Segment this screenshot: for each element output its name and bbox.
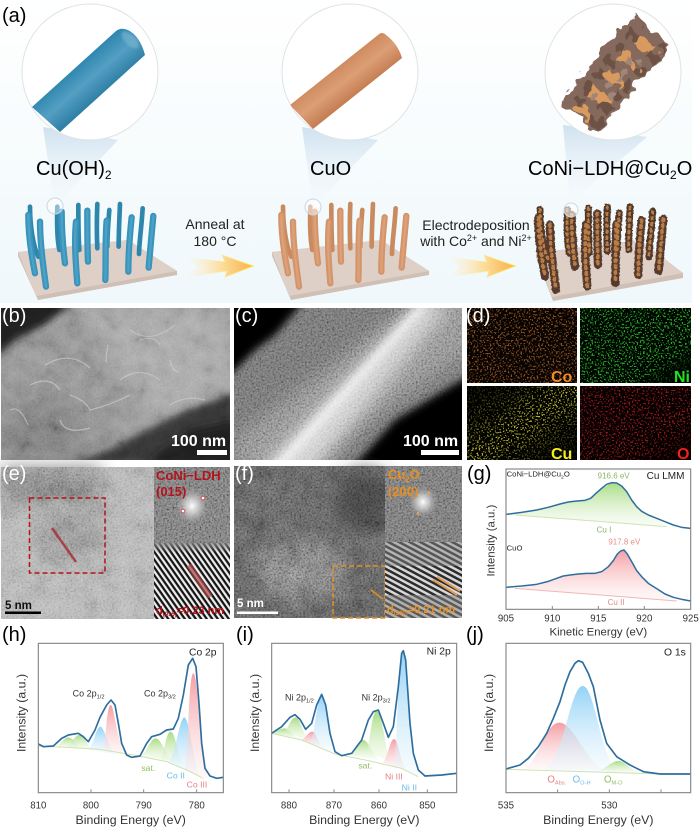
panel label j: (j): [466, 624, 484, 646]
scale bar f: [237, 598, 278, 614]
text: anneal condition: [185, 216, 245, 249]
frame: [38, 643, 223, 793]
peak labels: Cu I: [597, 526, 611, 535]
x axis title: Binding Energy (eV): [309, 813, 419, 827]
x axis: 910: [544, 614, 560, 625]
peak labels: 3/2: [168, 695, 176, 701]
x axis: 850: [419, 800, 435, 811]
label CoNi-LDH (015): (015): [156, 484, 186, 499]
d spacing e: =0.23 nm: [177, 605, 224, 617]
d spacing e: (015): [163, 612, 177, 618]
x axis: 880: [281, 800, 297, 811]
curve: CuO: [506, 550, 691, 601]
lattice marker: [52, 528, 76, 562]
peak labels: [285, 693, 391, 705]
panel a: synthesis schematic: [0, 0, 692, 303]
y axis title: Intensity (a.u.): [482, 674, 496, 752]
fit OAbs: [523, 723, 603, 770]
panel e: HRTEM CoNi-LDH: [1, 467, 230, 619]
sample labels: CoNi−LDH@Cu: [507, 470, 561, 479]
peak labels: Co 2p: [73, 689, 97, 699]
label Cu2O (200): 2: [405, 475, 410, 484]
text: electrodeposition condition: and Ni: [477, 233, 522, 249]
frame: [506, 643, 691, 793]
chart h: Co 2p: [14, 643, 223, 827]
FFT inset: [385, 466, 462, 542]
panel label f: (f): [235, 463, 254, 485]
text: electrodeposition condition: 2+: [522, 233, 532, 243]
panel b: SEM image: [1, 308, 230, 460]
fits satellite: [272, 711, 390, 762]
label Cu(OH)2: Cu(OH): [36, 158, 105, 180]
scale bar c: 100 nm: [403, 433, 458, 450]
map Ni: Ni: [674, 369, 690, 386]
nanosheet wrinkles: [10, 325, 205, 430]
callout cone: CoNi-LDH: [563, 125, 647, 203]
lattice marker: [371, 590, 383, 599]
map Ni: [580, 308, 691, 386]
title: Co 2p: [189, 647, 217, 658]
label Cu2O (200): [388, 467, 420, 499]
label Cu2O (200): (200): [388, 484, 418, 499]
FFT inset: [154, 467, 230, 543]
panel label b: (b): [2, 305, 26, 327]
fits Ni III: [301, 732, 407, 771]
zoom circle: CuO nanorod: [282, 4, 418, 140]
component labels: Ni III: [385, 771, 403, 781]
callout cone: Cu(OH)2: [43, 127, 118, 207]
text: electrodeposition condition: 2+: [467, 233, 477, 243]
dashed selection box: [333, 566, 385, 618]
peak labels: 917.8 eV: [608, 538, 641, 547]
d spacing e: d: [156, 605, 163, 617]
peak labels: 1/2: [306, 699, 314, 705]
title: O 1s: [664, 647, 686, 658]
x axis: [281, 789, 435, 811]
panel label d: (d): [466, 305, 490, 327]
peak labels: [597, 472, 641, 607]
substrate 3 with CoNi-LDH rods: [536, 203, 683, 301]
text: electrodeposition condition: [419, 217, 532, 249]
x axis: [30, 789, 205, 811]
x axis: 905: [498, 614, 514, 625]
y axis title: Intensity (a.u.): [248, 674, 262, 752]
panel label e: (e): [2, 463, 26, 485]
panel label g: (g): [467, 463, 491, 485]
panel f: HRTEM Cu2O: [234, 466, 462, 618]
fit: Cu II: [515, 550, 677, 601]
scale bar e: [5, 600, 41, 614]
component labels: O: [547, 775, 555, 786]
panel label h: (h): [2, 624, 26, 646]
substrate 2 with CuO rods: [272, 199, 429, 300]
sample labels: [507, 470, 570, 552]
y axis title: Intensity (a.u.): [485, 505, 497, 577]
zoom circle: CoNi-LDH nanorod: [545, 4, 681, 140]
fit: Cu I: [506, 483, 667, 527]
title: Cu LMM: [647, 471, 684, 482]
x axis: [498, 789, 661, 811]
peak labels: Ni 2p: [285, 693, 306, 703]
envelope curve: [38, 658, 223, 778]
zoom circle: Cu(OH)2 nanorod: [22, 4, 158, 140]
x axis: 800: [83, 800, 99, 811]
arrow: electrodeposition: [447, 255, 515, 277]
arrow: anneal: [185, 255, 253, 277]
component labels: [547, 775, 623, 787]
label CoNi-LDH (015): [156, 468, 221, 499]
y axis title: Intensity (a.u.): [14, 674, 28, 752]
label CuO: CuO: [310, 158, 351, 180]
component labels: Ni II: [402, 783, 417, 793]
fits Co II: [88, 717, 200, 777]
x axis title: Kinetic Energy (eV): [550, 626, 647, 638]
envelope curve: [272, 651, 457, 776]
peak labels: 3/2: [383, 699, 391, 705]
panel label a: (a): [2, 5, 26, 27]
scale bar b: 100 nm: [171, 433, 226, 450]
curve: CoNi-LDH@Cu2O: [506, 483, 691, 528]
component labels: Abs.: [555, 781, 567, 787]
component labels: [141, 763, 207, 790]
label CoNi-LDH (015): CoNi−LDH: [156, 468, 221, 483]
label CoNi-LDH@Cu2O: 2: [670, 168, 677, 182]
lattice fringes inset: [154, 543, 230, 619]
map Co: Co: [551, 369, 573, 386]
x axis: 860: [371, 800, 387, 811]
component labels: [358, 760, 417, 793]
x axis: 530: [601, 800, 617, 811]
lattice fringes inset: [385, 542, 462, 618]
map Cu: Cu: [551, 446, 572, 463]
text: electrodeposition condition: with Co: [420, 233, 467, 249]
component labels: O-H: [580, 781, 591, 787]
fit OMO: [598, 761, 642, 773]
component labels: sat.: [358, 760, 372, 770]
chart i: Ni 2p: [248, 643, 457, 827]
chart j: O 1s: [482, 643, 691, 827]
d spacing f: d: [387, 604, 394, 616]
x axis: 790: [136, 800, 152, 811]
fits Ni II: [311, 652, 418, 777]
fit OOH: [543, 686, 618, 773]
frame: [506, 469, 691, 609]
x axis: 920: [636, 614, 652, 625]
label CoNi-LDH@Cu2O: O: [677, 158, 692, 180]
label Cu(OH)2: 2: [105, 168, 112, 182]
panel c: STEM image: [234, 308, 462, 460]
panel label c: (c): [235, 305, 258, 327]
sample labels: O: [564, 470, 570, 479]
fits satellite: [53, 732, 185, 765]
label Cu2O (200): O: [410, 467, 420, 482]
panel d: EDS maps: [467, 308, 691, 463]
text: electrodeposition condition: Electrodeposition: [422, 217, 530, 233]
substrate 1 with Cu(OH)2 rods: [18, 198, 177, 300]
callout cone: CuO: [302, 127, 378, 207]
x axis: 810: [30, 800, 46, 811]
component labels: M-O: [612, 781, 623, 787]
peak labels: Cu II: [608, 598, 625, 607]
x axis title: Binding Energy (eV): [543, 813, 653, 827]
envelope curve: [506, 661, 691, 774]
peak labels: Co 2p: [144, 689, 168, 699]
label Cu2O (200): Cu: [388, 467, 405, 482]
component labels: Co II: [167, 771, 185, 781]
x axis: 780: [189, 800, 205, 811]
peak labels: 1/2: [97, 695, 105, 701]
title: Ni 2p: [427, 647, 451, 658]
frame: [272, 643, 457, 793]
peak labels: [73, 689, 176, 701]
x axis: 915: [590, 614, 606, 625]
sample labels: CuO: [507, 543, 522, 552]
x axis: 535: [498, 800, 514, 811]
component labels: sat.: [141, 763, 155, 773]
chart g: Cu LMM: [485, 469, 699, 638]
panel label i: (i): [236, 624, 254, 646]
fits Co III: [103, 673, 208, 779]
d spacing f: (200): [394, 611, 408, 617]
peak labels: Ni 2p: [362, 693, 383, 703]
d spacing f: =0.21 nm: [408, 604, 455, 616]
x axis title: Binding Energy (eV): [76, 813, 186, 827]
component labels: O: [604, 775, 612, 786]
text: anneal condition: 180 °C: [194, 233, 236, 249]
x axis: 870: [326, 800, 342, 811]
dashed selection box: [30, 498, 105, 573]
component labels: O: [573, 775, 580, 786]
x axis: [498, 606, 699, 625]
x axis: 925: [683, 614, 699, 625]
peak labels: 916.6 eV: [598, 472, 630, 481]
map Cu: [467, 386, 577, 463]
component labels: Co III: [187, 780, 207, 790]
map Co: [467, 308, 577, 386]
label CoNi-LDH@Cu2O: CoNi−LDH@Cu: [528, 158, 670, 180]
map O: [580, 386, 691, 463]
map O: O: [677, 446, 689, 463]
text: anneal condition: Anneal at: [185, 216, 245, 232]
scale bar f: 5 nm: [237, 598, 264, 610]
scale bar e: 5 nm: [5, 600, 32, 612]
sample labels: 2: [561, 474, 564, 480]
